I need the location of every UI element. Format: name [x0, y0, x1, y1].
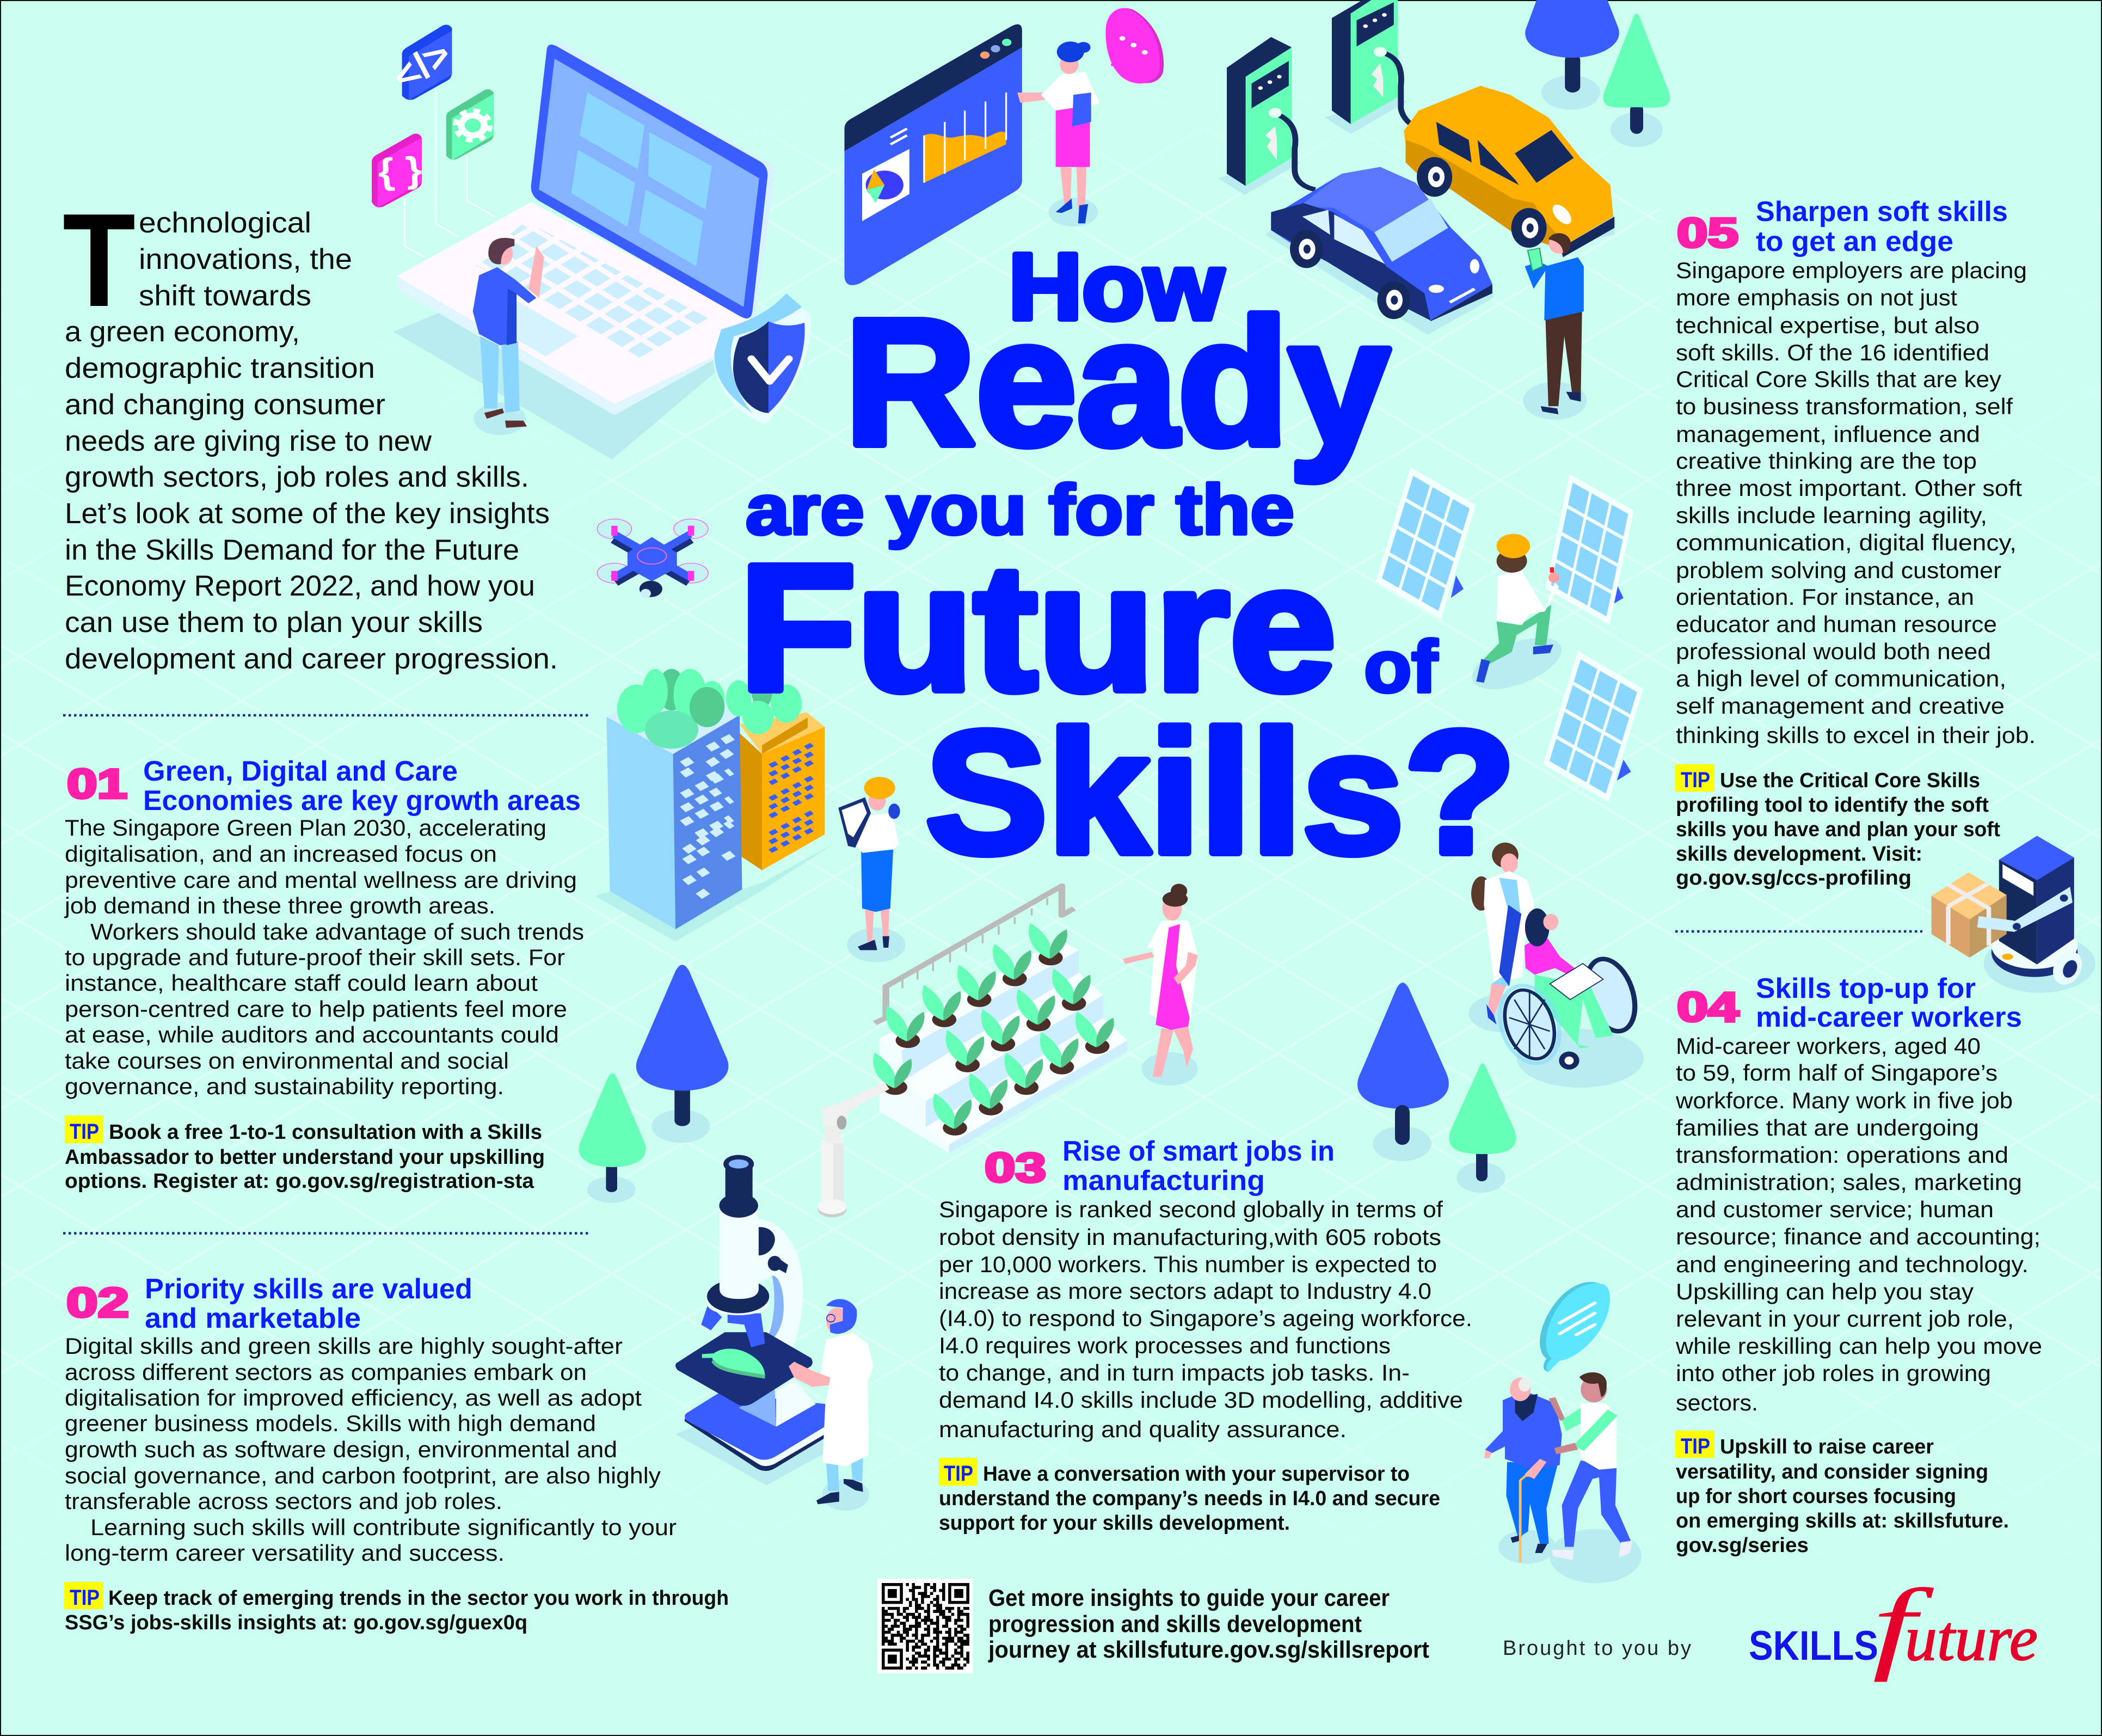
logo: SkillsFuture: f — [1872, 1568, 1934, 1683]
tip 03: TIP — [944, 1462, 973, 1486]
laptop screen — [531, 40, 776, 323]
body 03: Singapore is ranked second globally in terms of — [939, 1197, 1443, 1222]
blue tree top right — [1525, 0, 1619, 109]
heading 03: manufacturing — [1062, 1165, 1265, 1197]
title line: Future: Future — [739, 527, 1336, 728]
tip 05 — [1675, 764, 2000, 890]
microscope — [675, 1155, 826, 1486]
number 05: 05 — [1677, 210, 1738, 256]
robotic arm — [821, 1082, 889, 1198]
body 04: relevant in your current job role, — [1676, 1306, 2014, 1332]
body 01: job demand in these three growth areas. — [64, 893, 495, 918]
heading 03 — [1062, 1136, 1335, 1197]
body 02: Digital skills and green skills are highly sought-after — [65, 1333, 623, 1359]
title — [739, 234, 1516, 890]
tip 04: up for short courses focusing — [1676, 1485, 1956, 1508]
body 02: social governance, and carbon footprint, are also highly — [65, 1463, 661, 1488]
man with phone — [1523, 233, 1587, 420]
body 04: while reskilling can help you move — [1675, 1333, 2042, 1359]
icon: curly braces — [372, 133, 423, 207]
body 01: preventive care and mental wellness are driving — [65, 867, 577, 893]
tip 04: on emerging skills at: skillsfuture. — [1676, 1510, 2009, 1532]
intro text: and changing consumer — [65, 389, 385, 421]
body 02: long-term career versatility and success. — [65, 1540, 505, 1566]
engineer with clipboard — [838, 777, 905, 962]
tip 02 — [64, 1582, 729, 1634]
body 05: Critical Core Skills that are key — [1676, 366, 2001, 392]
EV charger right — [1324, 0, 1439, 140]
tree group lower right — [1373, 1064, 1516, 1193]
tip 03: Have a conversation with your supervisor to — [983, 1463, 1410, 1486]
body 05: three most important. Other soft — [1676, 475, 2022, 501]
connector lines — [404, 90, 495, 257]
body 04: Mid-career workers, aged 40 — [1676, 1033, 1981, 1059]
tip 05: skills you have and plan your soft — [1676, 818, 2000, 841]
body 03: (I4.0) to respond to Singapore’s ageing workforce. — [939, 1305, 1472, 1331]
tip 02: SSG’s jobs-skills insights at: go.gov.sg/guex0q — [65, 1611, 527, 1634]
person at keyboard — [473, 238, 544, 435]
body 03: robot density in manufacturing,with 605 robots — [939, 1224, 1441, 1250]
tip 04: versatility, and consider signing — [1676, 1461, 1988, 1483]
QR code — [877, 1579, 973, 1673]
delivery robot with parcel — [1932, 836, 2095, 993]
body 03: increase as more sectors adapt to Industry 4.0 — [939, 1278, 1431, 1304]
body 05: to business transformation, self — [1676, 394, 2013, 419]
tip 01: TIP — [70, 1120, 99, 1144]
body 04: and customer service; human — [1676, 1197, 1994, 1222]
heading 04: mid-career workers — [1756, 1002, 2022, 1033]
tip 02: Keep track of emerging trends in the sector you work in through — [108, 1587, 729, 1610]
illustration: dashboard, charging stations and cars — [845, 0, 1619, 420]
body 04: resource; finance and accounting; — [1676, 1224, 2040, 1249]
tip 01 — [65, 1115, 545, 1193]
body 05: orientation. For instance, an — [1676, 584, 1974, 610]
drop cap: T — [63, 186, 136, 334]
body 01: to upgrade and future-proof their skill sets. For — [65, 944, 565, 970]
illustration: microscope and scientist — [675, 1143, 874, 1511]
tip 02: TIP — [70, 1586, 100, 1610]
body 05: self management and creative — [1676, 693, 2005, 719]
nurse and wheelchair patient — [1468, 843, 1644, 1088]
body 03: to change, and in turn impacts job tasks. In- — [939, 1360, 1410, 1385]
body 04: Upskilling can help you stay — [1676, 1279, 1974, 1304]
number 02: 02 — [66, 1280, 129, 1326]
heading 04 — [1756, 973, 2022, 1033]
heading 01 — [143, 756, 581, 817]
title line: How: How — [1009, 234, 1224, 339]
illustration: solar panels and wheelchair care — [1357, 471, 2095, 1109]
body 04: workforce. Many work in five job — [1675, 1088, 2013, 1113]
tip 05: TIP — [1681, 768, 1710, 792]
body 02: Learning such skills will contribute significantly to your — [90, 1514, 677, 1540]
title line: Skills?: Skills? — [925, 695, 1516, 890]
solar panel three — [1546, 655, 1640, 798]
call to action text: progression and skills development — [988, 1611, 1362, 1637]
illustration: buildings, engineer and hydroponics — [579, 669, 1198, 1203]
body 05: thinking skills to excel in their job. — [1676, 722, 2036, 748]
icon: curly braces: { } — [377, 149, 423, 192]
body 05: problem solving and customer — [1676, 557, 2001, 583]
tip 03: understand the company’s needs in I4.0 and secure — [939, 1487, 1440, 1510]
blue tree right — [1357, 983, 1449, 1109]
laptop shadow — [393, 311, 729, 459]
intro text: Economy Report 2022, and how you — [65, 570, 535, 602]
analytics dashboard — [845, 24, 1022, 285]
body 03: I4.0 requires work processes and functions — [939, 1333, 1391, 1358]
body 04: families that are undergoing — [1676, 1115, 1979, 1140]
number 04: 04 — [1677, 984, 1739, 1030]
EV charger left — [1218, 37, 1316, 195]
scientist — [789, 1299, 874, 1511]
panel: section 04 mid-career workers — [1675, 973, 2042, 1557]
logo: SkillsFuture: SKILLS — [1749, 1623, 1878, 1669]
intro text: demographic transition — [65, 352, 375, 384]
body 01 — [64, 815, 584, 1099]
heading 02: Priority skills are valued — [145, 1273, 472, 1305]
body 04: administration; sales, marketing — [1676, 1169, 2022, 1195]
intro text: can use them to plan your skills — [65, 606, 483, 639]
icon: drone — [597, 519, 708, 598]
blue car — [1265, 167, 1493, 335]
solar panel two — [1548, 479, 1631, 621]
body 05: communication, digital fluency, — [1676, 530, 2017, 555]
solar worker — [1464, 534, 1570, 700]
body 02: greener business models. Skills with high demand — [65, 1410, 596, 1436]
heading 01: Economies are key growth areas — [143, 785, 581, 817]
body 02: growth such as software design, environmental and — [65, 1437, 617, 1462]
heading 03: Rise of smart jobs in — [1062, 1136, 1335, 1167]
body 04: sectors. — [1676, 1390, 1758, 1415]
call to action text: Get more insights to guide your career — [988, 1585, 1390, 1611]
body 03: manufacturing and quality assurance. — [939, 1416, 1347, 1442]
panel: section 03 smart jobs in manufacturing — [939, 1136, 1472, 1535]
hydroponic plant racks — [873, 886, 1127, 1153]
tip 01: Ambassador to better understand your upskilling — [65, 1146, 545, 1169]
illustration: elderly man and helper — [1484, 1282, 1642, 1583]
tip 05: go.gov.sg/ccs-profiling — [1676, 867, 1912, 890]
tip 04: Upskill to raise career — [1720, 1436, 1934, 1458]
body 02 — [65, 1333, 677, 1566]
intro text: needs are giving rise to new — [65, 425, 432, 457]
icon: security shield — [714, 293, 812, 424]
intro text — [63, 186, 558, 675]
solar panel one — [1379, 471, 1473, 615]
intro text: Let’s look at some of the key insights — [65, 498, 550, 530]
body 04: to 59, form half of Singapore’s — [1676, 1060, 1997, 1085]
body 05: a high level of communication, — [1676, 666, 2006, 691]
yellow car — [1404, 86, 1614, 257]
body 04 — [1675, 1033, 2042, 1415]
body 05: Singapore employers are placing — [1676, 257, 2027, 283]
icon: gear — [446, 89, 494, 160]
body 05: more emphasis on not just — [1676, 285, 1957, 310]
tip 05: Use the Critical Core Skills — [1720, 769, 1980, 792]
body 04: transformation: operations and — [1676, 1142, 2008, 1168]
green tree top right — [1603, 14, 1670, 147]
body 05: technical expertise, but also — [1676, 312, 1980, 338]
tip 03 — [939, 1458, 1440, 1535]
body 01: digitalisation, and an increased focus on — [65, 841, 497, 867]
robot arm base — [818, 1143, 847, 1217]
body 05: educator and human resource — [1676, 611, 1997, 637]
doctor walking — [1123, 884, 1198, 1085]
helper — [1548, 1372, 1642, 1583]
body 04: into other job roles in growing — [1676, 1360, 1991, 1386]
solar panel stands — [1451, 575, 1631, 781]
body 02: transferable across sectors and job roles. — [65, 1488, 502, 1514]
heading 05: to get an edge — [1756, 226, 1953, 257]
body 05: creative thinking are the top — [1676, 448, 1977, 474]
body 01: Workers should take advantage of such trends — [90, 919, 584, 944]
tip 05: skills development. Visit: — [1676, 843, 1922, 866]
intro text: shift towards — [139, 280, 311, 312]
heading 02: and marketable — [145, 1303, 361, 1334]
tip 04: TIP — [1681, 1434, 1710, 1458]
body 05: professional would both need — [1676, 639, 1991, 664]
body 01: at ease, while auditors and accountants could — [65, 1022, 559, 1047]
heading 04: Skills top-up for — [1756, 973, 1976, 1004]
number 03: 03 — [985, 1145, 1046, 1191]
panel: section 05 soft skills — [1675, 196, 2036, 890]
intro text: a green economy, — [65, 316, 300, 348]
body 01: The Singapore Green Plan 2030, accelerating — [65, 815, 546, 841]
body 05 — [1676, 257, 2036, 748]
speech bubble — [1540, 1282, 1610, 1372]
body 05: skills include learning agility, — [1676, 502, 1987, 528]
body 01: instance, healthcare staff could learn about — [65, 970, 538, 996]
panel: section 01 green, digital and care economies — [64, 756, 584, 1193]
heading 02 — [145, 1273, 472, 1334]
intro text: growth sectors, job roles and skills. — [65, 461, 529, 493]
speech bubble — [1105, 8, 1164, 83]
heading 05: Sharpen soft skills — [1756, 196, 2008, 228]
intro text: echnological — [139, 207, 311, 239]
tip 01: options. Register at: go.gov.sg/registration-sta — [65, 1170, 534, 1193]
green tree left — [579, 1074, 646, 1203]
body 01: governance, and sustainability reporting. — [65, 1074, 504, 1099]
tip 04: gov.sg/series — [1676, 1534, 1809, 1557]
green skyscrapers — [595, 669, 836, 941]
intro text: in the Skills Demand for the Future — [65, 534, 519, 566]
presenter woman — [1017, 41, 1100, 226]
call to action text: journey at skillsfuture.gov.sg/skillsreport — [988, 1636, 1429, 1663]
title line: Ready: Ready — [845, 281, 1391, 483]
body 03: demand I4.0 skills include 3D modelling, additive — [939, 1387, 1463, 1413]
intro text: development and career progression. — [65, 643, 558, 675]
body 02: across different sectors as companies embark on — [65, 1359, 587, 1385]
heading 01: Green, Digital and Care — [143, 756, 458, 787]
elderly man — [1484, 1378, 1562, 1564]
tip 04 — [1675, 1431, 2009, 1557]
blue tree left — [636, 965, 728, 1143]
body 04: and engineering and technology. — [1676, 1252, 2029, 1277]
title line: of: of — [1364, 625, 1438, 708]
icon: code tag: </> — [383, 33, 460, 98]
body 01: person-centred care to help patients feel more — [65, 996, 567, 1022]
body 03: per 10,000 workers. This number is expected to — [939, 1252, 1437, 1277]
body 05: management, influence and — [1676, 421, 1980, 447]
call to action text — [988, 1585, 1429, 1663]
panel: section 02 priority skills — [64, 1273, 729, 1634]
number 01: 01 — [67, 761, 127, 807]
tip 01: Book a free 1-to-1 consultation with a Skills — [109, 1121, 542, 1144]
tip 05: profiling tool to identify the soft — [1676, 794, 1989, 817]
brought to you by credit: Brought to you by — [1503, 1637, 1691, 1660]
body 02: digitalisation for improved efficiency, as well as adopt — [65, 1385, 642, 1410]
body 01: take courses on environmental and social — [65, 1048, 509, 1074]
logo: SkillsFuture — [1749, 1568, 2038, 1683]
laptop base — [397, 202, 771, 415]
title line: are you for the: are you for the — [746, 470, 1294, 549]
intro text: innovations, the — [139, 243, 352, 275]
logo: SkillsFuture: uture — [1905, 1603, 2038, 1674]
tip 03: support for your skills development. — [939, 1512, 1290, 1535]
heading 05 — [1756, 196, 2008, 257]
illustration: laptop with person, code icons and shield — [372, 24, 812, 598]
body 05: soft skills. Of the 16 identified — [1676, 340, 1989, 365]
body 03 — [939, 1197, 1472, 1442]
